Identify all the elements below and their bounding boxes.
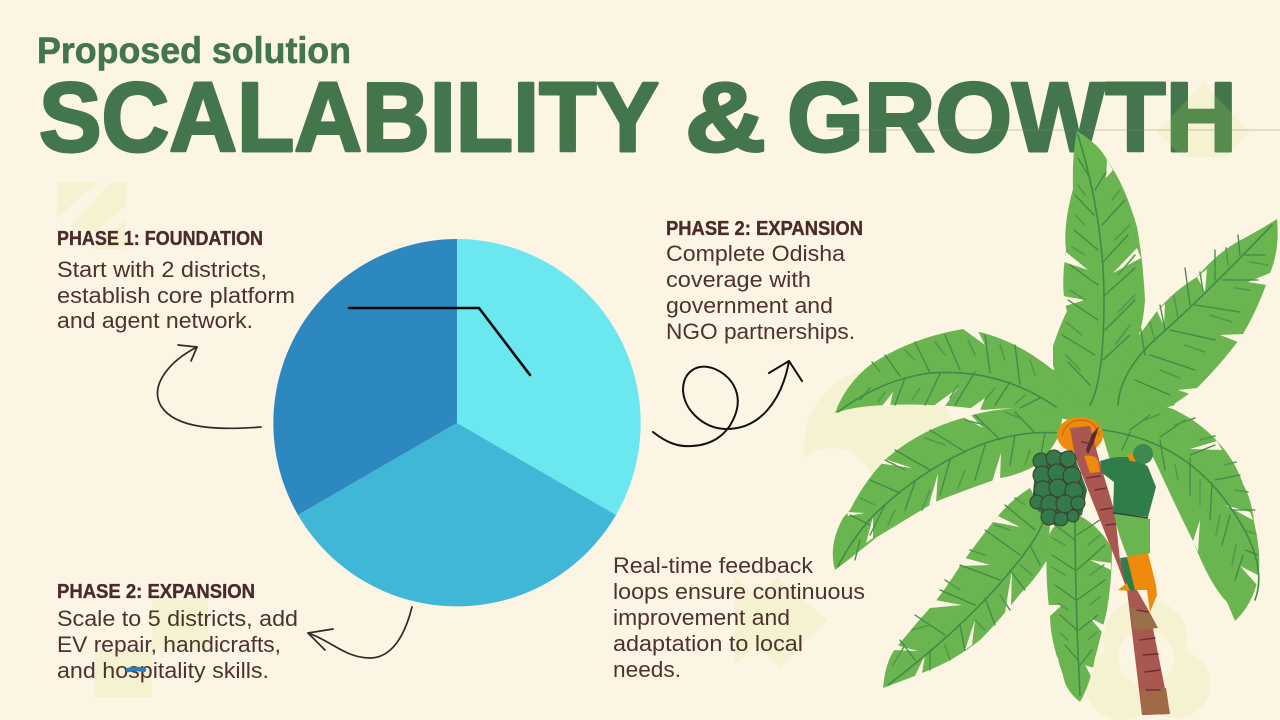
text block: phase 1 foundation: establish core platform bbox=[57, 283, 295, 308]
text block: real-time feedback bbox=[613, 553, 865, 682]
arrow: looping to upper phase 2 bbox=[653, 361, 802, 446]
text block: phase 2 expansion, upper right: NGO partnerships. bbox=[666, 319, 855, 344]
text block: phase 2 expansion, upper right: PHASE 2: EXPANSION bbox=[666, 218, 863, 240]
text block: phase 1 foundation: Start with 2 districts, bbox=[57, 257, 267, 282]
text block: phase 1 foundation bbox=[57, 228, 295, 333]
subtitle: Proposed solution bbox=[37, 30, 351, 71]
tinted overlap on final title letter bbox=[1171, 96, 1232, 152]
title: GROWTH bbox=[787, 62, 1237, 172]
frond: upper left bbox=[835, 329, 1062, 416]
blue squiggle mark bbox=[128, 669, 144, 670]
text block: phase 2 expansion, upper right: coverage with bbox=[666, 267, 811, 292]
frond: middle left bbox=[833, 409, 1063, 570]
palm tree illustration bbox=[833, 131, 1278, 715]
text block: real-time feedback: Real-time feedback bbox=[613, 553, 814, 578]
title: & bbox=[685, 62, 766, 172]
arrow: pie to lower phase 2 bbox=[308, 607, 412, 658]
frond: upper right bbox=[1115, 219, 1278, 410]
climber figure bbox=[1084, 444, 1157, 612]
text block: real-time feedback: adaptation to local bbox=[613, 631, 803, 656]
text block: phase 2 expansion, lower left: Scale to 5 districts, add bbox=[57, 606, 298, 631]
text block: real-time feedback: loops ensure continuous bbox=[613, 579, 865, 604]
pie chart bbox=[273, 239, 641, 606]
trunk bbox=[1070, 426, 1170, 715]
arrow: pie to phase 1 bbox=[158, 345, 261, 428]
crown fill between fronds bbox=[1053, 345, 1175, 428]
title bbox=[39, 62, 1237, 172]
title: SCALABILITY bbox=[39, 62, 659, 172]
thin horizontal rule bbox=[828, 129, 1280, 131]
text block: real-time feedback: improvement and bbox=[613, 605, 790, 630]
text block: phase 2 expansion, upper right: government and bbox=[666, 293, 833, 318]
text block: phase 2 expansion, upper right: Complete Odisha bbox=[666, 241, 846, 266]
coconut bunch bbox=[1030, 450, 1087, 526]
text block: phase 1 foundation: PHASE 1: FOUNDATION bbox=[57, 228, 263, 250]
text block: phase 2 expansion, lower left: and hospitality skills. bbox=[57, 658, 269, 683]
text block: phase 2 expansion, upper right bbox=[666, 218, 863, 344]
text block: phase 2 expansion, lower left: EV repair, handicrafts, bbox=[57, 632, 281, 657]
frond: right bbox=[1098, 405, 1259, 621]
text block: phase 2 expansion, lower left bbox=[57, 581, 298, 683]
frond: top bbox=[1053, 131, 1145, 410]
black line marker on pie bbox=[349, 308, 530, 375]
harvesting knife bbox=[1086, 426, 1099, 454]
frond: lower left bbox=[883, 488, 1050, 688]
text block: phase 2 expansion, lower left: PHASE 2: EXPANSION bbox=[57, 581, 255, 603]
text block: real-time feedback: needs. bbox=[613, 657, 681, 682]
frond: bottom bbox=[1046, 510, 1112, 702]
orange collar at crown bbox=[1057, 417, 1103, 453]
text block: phase 1 foundation: and agent network. bbox=[57, 308, 253, 333]
